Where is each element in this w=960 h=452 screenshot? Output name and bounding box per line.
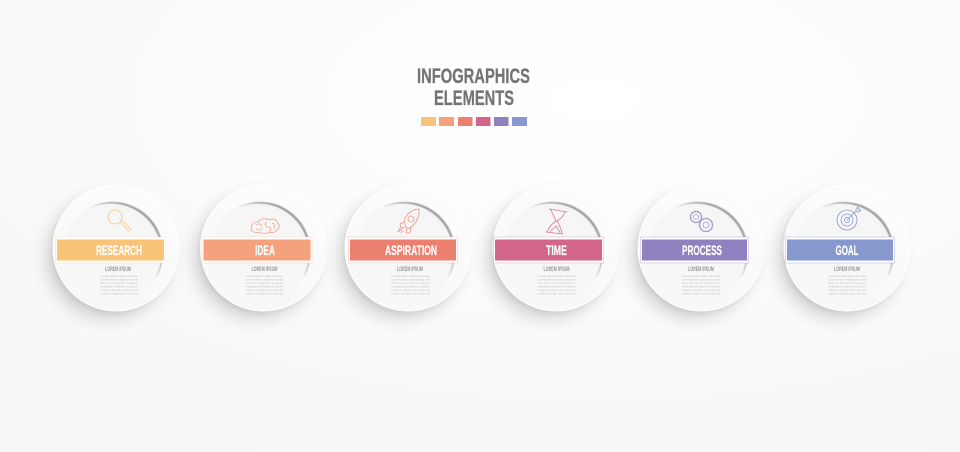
text block: aspiration: incididunt ut labore et dolore [392, 284, 430, 288]
text block: process: magna aliqua ut enim ad [682, 288, 720, 292]
icon: rocket [398, 209, 419, 233]
icon: magnifying glass [108, 210, 131, 231]
text block: idea: LOREM IPSUM [252, 266, 278, 273]
text block: idea [246, 266, 283, 296]
title [417, 65, 530, 110]
text block: aspiration: Lorem ipsum dolor sit amet [392, 274, 430, 278]
band: process: PROCESS [682, 242, 722, 258]
panel: time [487, 185, 619, 318]
text block: research: sed do eiusmod tempor [100, 281, 138, 285]
text block: goal [828, 266, 866, 296]
text block: process: consectetur adipiscing elit [682, 278, 720, 282]
title: ELEMENTS [434, 87, 514, 110]
text block: time: consectetur adipiscing elit [538, 278, 576, 282]
text block: aspiration: sed do eiusmod tempor [392, 281, 430, 285]
band: idea: IDEA [255, 242, 275, 258]
text block: idea: Lorem ipsum dolor sit amet [246, 274, 283, 278]
text block: goal: Lorem ipsum dolor sit amet [828, 274, 866, 278]
band: goal: GOAL [836, 242, 859, 258]
text block: time: incididunt ut labore et dolore [538, 284, 576, 288]
text block: idea: sed do eiusmod tempor [246, 281, 283, 285]
text block: research: minim veniam quis nostrud [100, 292, 138, 296]
text block: process: incididunt ut labore et dolore [682, 284, 720, 288]
text block: idea: incididunt ut labore et dolore [246, 284, 283, 288]
text block: idea: minim veniam quis nostrud [246, 292, 283, 296]
text block: aspiration: magna aliqua ut enim ad [392, 288, 430, 292]
text block: process: minim veniam quis nostrud [682, 292, 720, 296]
text block: goal: magna aliqua ut enim ad [828, 288, 866, 292]
colour swatches [421, 117, 527, 126]
panel: research [47, 185, 179, 318]
band: time: TIME [546, 242, 567, 258]
text block: idea: magna aliqua ut enim ad [246, 288, 283, 292]
icon: gears [690, 212, 712, 232]
text block: goal: consectetur adipiscing elit [828, 278, 866, 282]
text block: time: Lorem ipsum dolor sit amet [538, 274, 576, 278]
text block: time: magna aliqua ut enim ad [538, 288, 576, 292]
text block: process: Lorem ipsum dolor sit amet [682, 274, 720, 278]
text block: aspiration: consectetur adipiscing elit [392, 278, 430, 282]
text block: time: minim veniam quis nostrud [538, 292, 576, 296]
text block: research [100, 266, 138, 296]
text block: research: incididunt ut labore et dolore [100, 284, 138, 288]
text block: process [682, 266, 720, 296]
text block: aspiration: LOREM IPSUM [397, 266, 423, 273]
text block: research: consectetur adipiscing elit [100, 278, 138, 282]
text block: goal: LOREM IPSUM [834, 266, 860, 273]
text block: goal: incididunt ut labore et dolore [828, 284, 866, 288]
text block: aspiration: minim veniam quis nostrud [392, 292, 430, 296]
text block: time: LOREM IPSUM [544, 266, 570, 273]
band: aspiration: ASPIRATION [385, 242, 437, 258]
text block: aspiration [392, 266, 430, 296]
band: research: RESEARCH [96, 242, 142, 258]
panel: aspiration [339, 185, 471, 318]
icon: brain [251, 219, 279, 234]
text block: research: magna aliqua ut enim ad [100, 288, 138, 292]
panel: goal [778, 185, 910, 318]
text block: process: LOREM IPSUM [688, 266, 714, 273]
title: INFOGRAPHICS [417, 65, 530, 88]
panel: idea [194, 185, 326, 318]
text block: idea: consectetur adipiscing elit [246, 278, 283, 282]
text block: process: sed do eiusmod tempor [682, 281, 720, 285]
text block: research: Lorem ipsum dolor sit amet [100, 274, 138, 278]
icon: target [837, 207, 861, 230]
text block: time [538, 266, 576, 296]
text block: goal: sed do eiusmod tempor [828, 281, 866, 285]
text block: research: LOREM IPSUM [105, 266, 131, 273]
text block: time: sed do eiusmod tempor [538, 281, 576, 285]
icon: hourglass [546, 209, 567, 234]
panel: process [632, 185, 764, 318]
text block: goal: minim veniam quis nostrud [828, 292, 866, 296]
